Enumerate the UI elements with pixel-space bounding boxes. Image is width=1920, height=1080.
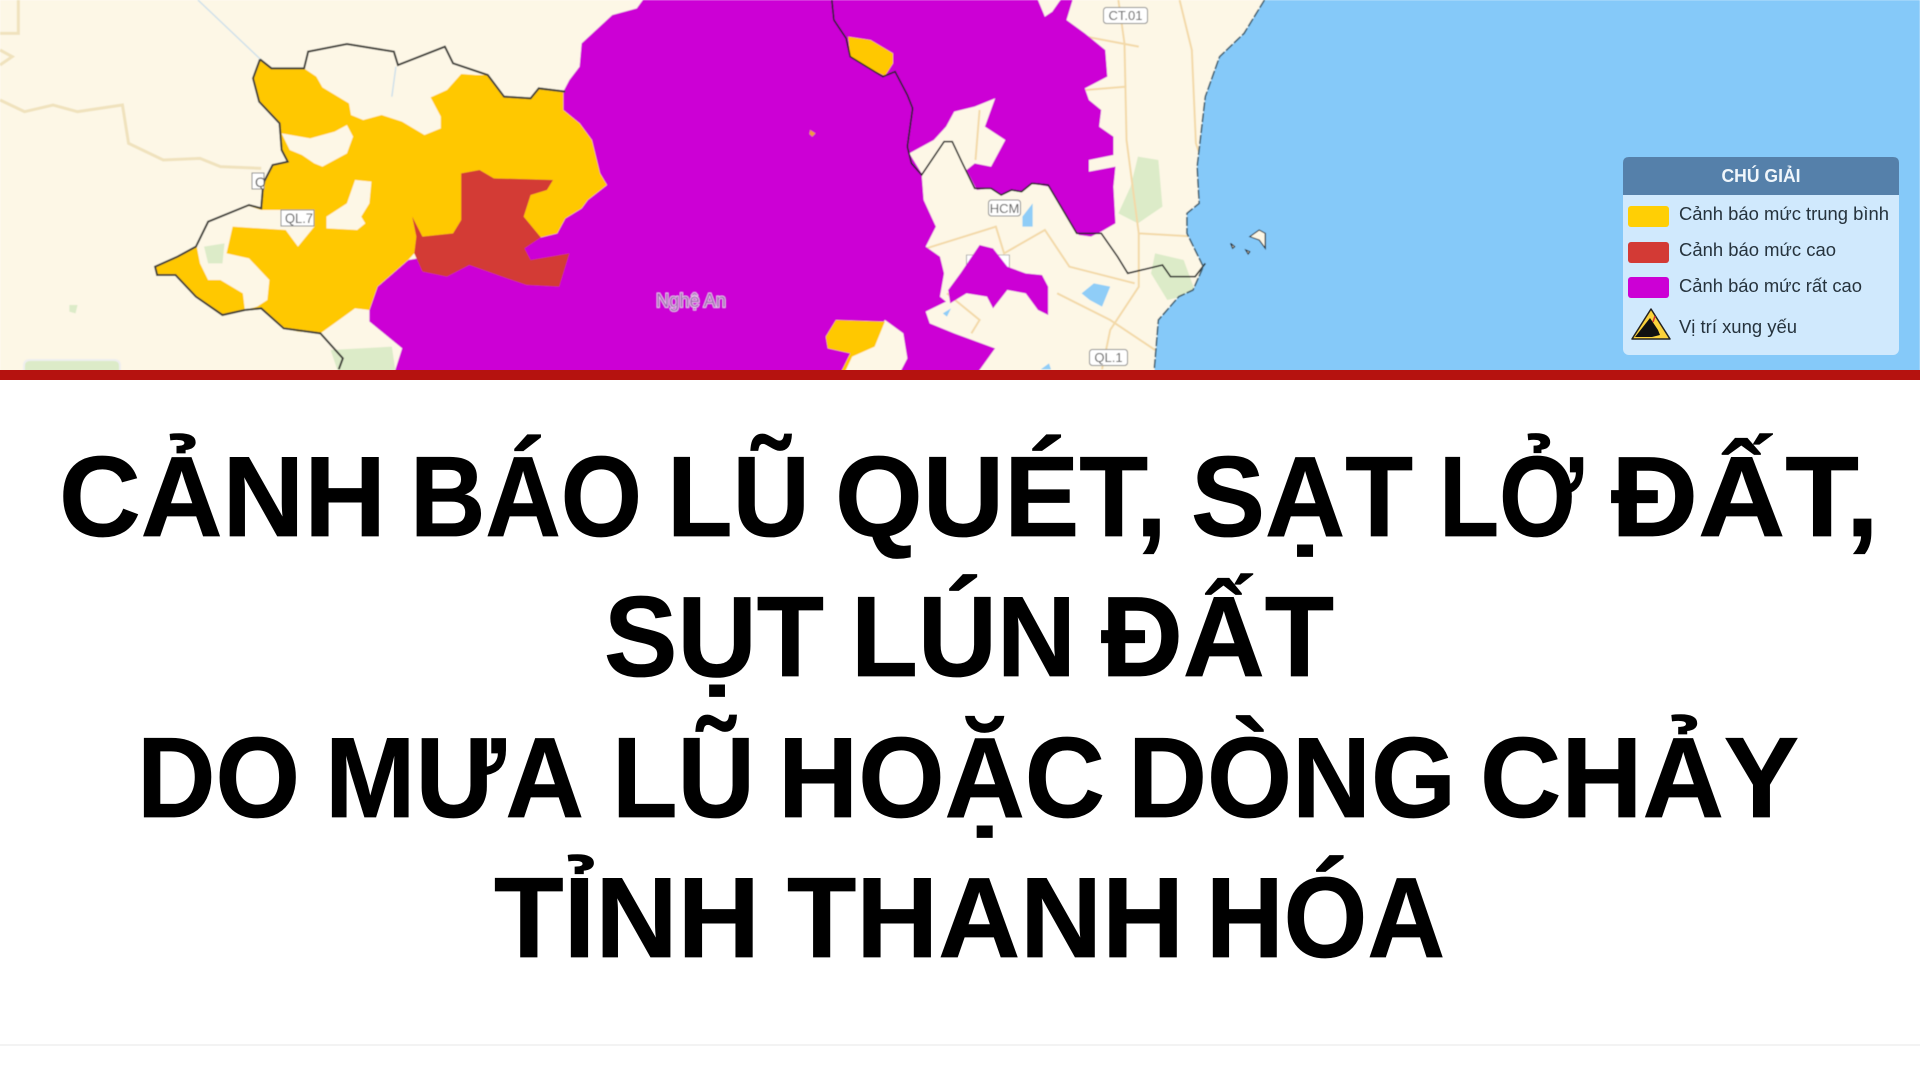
sea: [1154, 0, 1920, 374]
label: HCM: HCM: [990, 201, 1019, 216]
title line 4: [494, 855, 1445, 982]
title line 1: [59, 434, 1879, 561]
title line 3: MƯA: [325, 715, 584, 842]
lakes: [943, 203, 1110, 369]
icon: landslide warning triangle: [1632, 309, 1670, 339]
label: QL.1: [1090, 350, 1128, 366]
legend item: vulnerable location: Vị trí xung yếu: [1679, 317, 1797, 337]
title line 3: HOẶC: [778, 715, 1105, 842]
land patch south-west: [320, 308, 402, 374]
title line 1: LŨ: [667, 434, 810, 561]
title line 3: CHẢY: [1480, 715, 1799, 842]
hidden road label box: [967, 255, 1009, 270]
panel: hazard map: [0, 0, 1920, 374]
title line 3: [137, 715, 1799, 842]
title line 1: QUÉT,: [835, 434, 1167, 561]
coastline: [1154, 0, 1264, 369]
title line 3: LŨ: [612, 715, 755, 842]
legend header: [1623, 157, 1899, 195]
title line 2: LÚN: [851, 574, 1076, 701]
title: [59, 434, 1879, 982]
roads: [927, 0, 1204, 369]
title line 1: LỞ: [1439, 434, 1584, 561]
title line 1: SẠT: [1191, 434, 1413, 561]
green patches: [69, 157, 1196, 313]
title line 3: DO: [137, 715, 300, 842]
red divider bar: [0, 370, 1920, 380]
red region: [412, 170, 569, 287]
minimap stub: [24, 360, 120, 374]
title line 2: [604, 574, 1334, 701]
title line 1: CẢNH: [59, 434, 386, 561]
label: Q road stub: Q: [255, 174, 266, 190]
provincial borders: [155, 44, 565, 369]
bottom land and yellow patch: [840, 320, 907, 374]
yellow main region: [155, 59, 607, 333]
title line 4: THANH: [787, 855, 1184, 982]
legend item: very high: Cảnh báo mức rất cao: [1679, 276, 1862, 296]
legend item: medium: Cảnh báo mức trung bình: [1679, 204, 1889, 224]
small yellow patch: [848, 37, 893, 76]
title line 4: HÓA: [1206, 855, 1445, 982]
label: QL.7: QL.7: [285, 210, 313, 226]
legend item: high: Cảnh báo mức cao: [1679, 240, 1836, 260]
label: QL.1: QL.1: [1094, 350, 1123, 365]
legend item: very high: [1628, 276, 1862, 298]
small land inlet: [1040, 0, 1060, 17]
title line 1: ĐẤT,: [1611, 434, 1879, 561]
legend item: medium: [1628, 204, 1889, 227]
legend item: high: [1628, 240, 1836, 263]
title line 2: ĐẤT: [1101, 574, 1334, 701]
legend header: CHÚ GIẢI: [1722, 165, 1800, 186]
title line 4: TỈNH: [494, 855, 760, 982]
label: Nghệ An: Nghệ An: [656, 291, 726, 312]
title line 1: BÁO: [410, 434, 642, 561]
label: CT.01: CT.01: [1109, 8, 1142, 23]
title line 2: SỤT: [604, 574, 824, 701]
land holes in yellow: [197, 125, 371, 310]
legend item: vulnerable location: [1632, 309, 1797, 339]
panel: legend: [1623, 157, 1899, 355]
islands: [1231, 230, 1265, 254]
purple region: [369, 0, 1116, 374]
title line 3: DÒNG: [1128, 715, 1456, 842]
small purple island: [948, 245, 1048, 315]
